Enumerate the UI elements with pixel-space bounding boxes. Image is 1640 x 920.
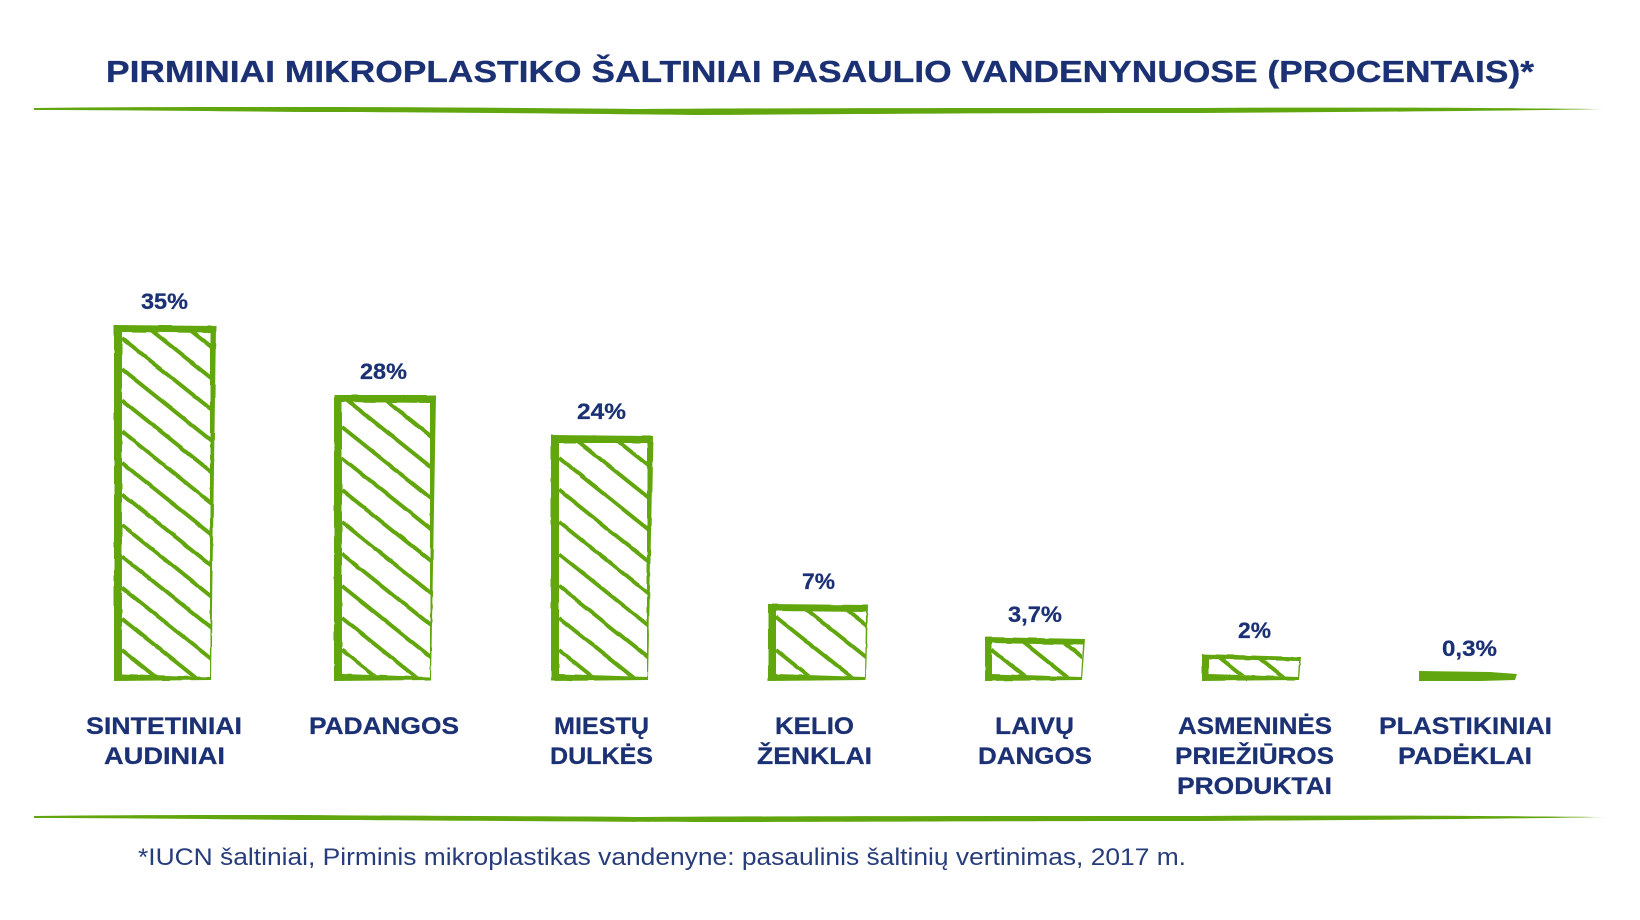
bar: asmeninės priežiūros produktai 2% bbox=[1202, 622, 1301, 682]
label: padangos: PADANGOS bbox=[309, 713, 459, 740]
bar: kelio ženklai 7% bbox=[768, 573, 868, 681]
top divider brush stroke bbox=[34, 107, 1604, 115]
bar: sintetiniai audiniai 35% bbox=[114, 293, 216, 681]
value 0,3%: 0,3% bbox=[1442, 636, 1497, 661]
label: sintetiniai audiniai bbox=[86, 713, 242, 770]
bottom divider brush stroke bbox=[34, 815, 1606, 822]
label: asmeninės priežiūros produktai: PRODUKTAI bbox=[1177, 773, 1332, 800]
value 28%: 28% bbox=[360, 359, 407, 384]
bar: padangos 28% bbox=[334, 363, 436, 681]
bar chart bbox=[114, 276, 1517, 730]
title: PIRMINIAI MIKROPLASTIKO ŠALTINIAI PASAULIO VANDENYNUOSE (PROCENTAIS)* bbox=[106, 53, 1535, 89]
label: laivų dangos: LAIVŲ bbox=[995, 713, 1074, 740]
value 2%: 2% bbox=[1238, 618, 1271, 643]
value 7%: 7% bbox=[802, 569, 835, 594]
label: kelio ženklai bbox=[757, 713, 872, 770]
label: kelio ženklai: ŽENKLAI bbox=[757, 742, 872, 770]
label: miestų dulkės bbox=[550, 713, 653, 770]
label: asmeninės priežiūros produktai: PRIEŽIŪROS bbox=[1175, 742, 1334, 770]
bar: plastikiniai padėklai 0,3% bbox=[1419, 636, 1517, 681]
label: kelio ženklai: KELIO bbox=[775, 713, 854, 740]
value 35%: 35% bbox=[141, 289, 188, 314]
label: miestų dulkės: DULKĖS bbox=[550, 743, 653, 770]
category labels bbox=[86, 713, 1552, 800]
label: laivų dangos bbox=[978, 713, 1092, 770]
label: plastikiniai padėklai bbox=[1379, 713, 1552, 770]
label: laivų dangos: DANGOS bbox=[978, 743, 1092, 770]
label: plastikiniai padėklai: PLASTIKINIAI bbox=[1379, 713, 1552, 740]
label: sintetiniai audiniai: SINTETINIAI bbox=[86, 713, 242, 740]
bar: miestų dulkės 24% bbox=[550, 403, 654, 682]
label: asmeninės priežiūros produktai bbox=[1175, 713, 1334, 800]
label: asmeninės priežiūros produktai: ASMENINĖS bbox=[1178, 713, 1332, 740]
value 24%: 24% bbox=[577, 399, 626, 424]
label: miestų dulkės: MIESTŲ bbox=[554, 713, 649, 740]
label: sintetiniai audiniai: AUDINIAI bbox=[104, 743, 225, 770]
footnote: *IUCN šaltiniai, Pirminis mikroplastikas vandenyne: pasaulinis šaltinių vertinimas, 2017 m. bbox=[138, 844, 1186, 871]
bar: laivų dangos 3,7% bbox=[985, 606, 1085, 682]
value 3,7%: 3,7% bbox=[1008, 602, 1062, 627]
label: plastikiniai padėklai: PADĖKLAI bbox=[1398, 743, 1532, 770]
